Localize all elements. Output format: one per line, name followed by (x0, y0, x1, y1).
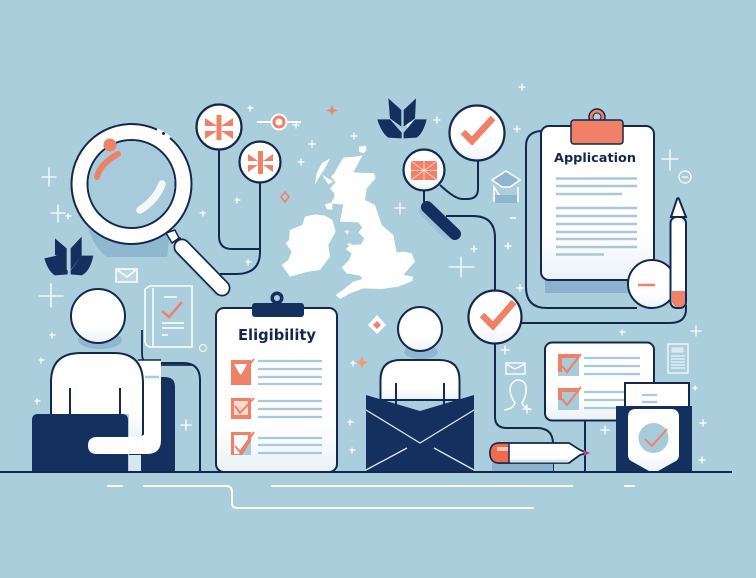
clipboard clip (252, 292, 304, 317)
person at desk (32, 289, 200, 472)
desk (32, 414, 128, 472)
board (541, 126, 654, 280)
icon: check circle lower (468, 290, 522, 344)
icon: orange star small (355, 356, 369, 369)
back outline (526, 131, 637, 308)
person with envelope (366, 307, 474, 472)
icon: side plus (679, 171, 691, 183)
minus circle (628, 260, 676, 308)
magnifier shadow (88, 228, 170, 257)
icon: orange star (326, 105, 338, 116)
clip (571, 109, 623, 144)
UK and Ireland map (282, 146, 415, 299)
person body (51, 353, 143, 440)
icon: document with check (142, 286, 192, 365)
icon: UK flag magnifier (404, 150, 455, 240)
magnifier handle (182, 247, 222, 288)
icon: person outline (504, 380, 531, 410)
heading: Application: Application (554, 150, 636, 165)
checkbox two (231, 398, 254, 419)
envelope (366, 395, 474, 472)
checkbox one (231, 359, 254, 385)
pencil body (490, 443, 587, 463)
icon: top lotus (377, 98, 427, 138)
outer connector (521, 305, 686, 323)
head shadow (78, 331, 122, 349)
folder (616, 406, 692, 472)
seal (638, 423, 668, 453)
pencil (670, 198, 686, 308)
bottom decorative lines (108, 486, 634, 508)
orange lens mark (97, 154, 118, 177)
card (625, 383, 689, 408)
chair outline (140, 363, 200, 472)
paper strip and arm (88, 360, 161, 454)
magnifier (72, 124, 228, 296)
text lines (556, 178, 637, 254)
icon: flag circle one (196, 104, 242, 150)
connector lines right (440, 159, 585, 472)
checklist lines (258, 361, 322, 453)
Eligibility clipboard (216, 292, 337, 472)
connector lines left (219, 148, 260, 274)
icon: check circle top (450, 106, 504, 160)
clipboard board (216, 308, 337, 472)
magnifier neck (166, 230, 183, 247)
checkbox two (558, 387, 581, 410)
pencil shadow (492, 463, 553, 471)
small dash (510, 217, 516, 219)
icon: small orange diamond (281, 192, 289, 202)
person head (71, 289, 125, 343)
icon: open box (492, 171, 520, 203)
shield (628, 409, 679, 472)
icon: flag circle two (240, 142, 280, 182)
icon: small envelope left (116, 269, 137, 282)
checkbox one (558, 354, 581, 376)
chair back (129, 377, 175, 472)
Ireland (282, 214, 336, 277)
head (398, 307, 442, 351)
icon: small ring (200, 344, 206, 352)
badge folder (616, 383, 692, 472)
board shadow (545, 280, 633, 293)
icon: form document (668, 344, 688, 373)
islands (315, 146, 367, 247)
head shadow (404, 345, 438, 359)
Application clipboard (521, 109, 686, 323)
sparkles (35, 84, 706, 463)
body (380, 360, 460, 400)
baseline (0, 471, 732, 473)
icon: mini envelope (506, 363, 525, 374)
checkbox three (231, 432, 254, 455)
lens highlight (140, 184, 162, 210)
icon: orange diamond (368, 315, 386, 334)
panel lines (584, 358, 640, 408)
icon: left lotus (44, 237, 93, 275)
Great Britain (330, 156, 415, 299)
icon: target node (257, 114, 301, 130)
forearm (88, 429, 160, 454)
magnifier ring (80, 132, 183, 236)
heading: Eligibility: Eligibility (238, 326, 316, 344)
pencil lying (490, 443, 590, 471)
checklist panel (545, 342, 654, 420)
